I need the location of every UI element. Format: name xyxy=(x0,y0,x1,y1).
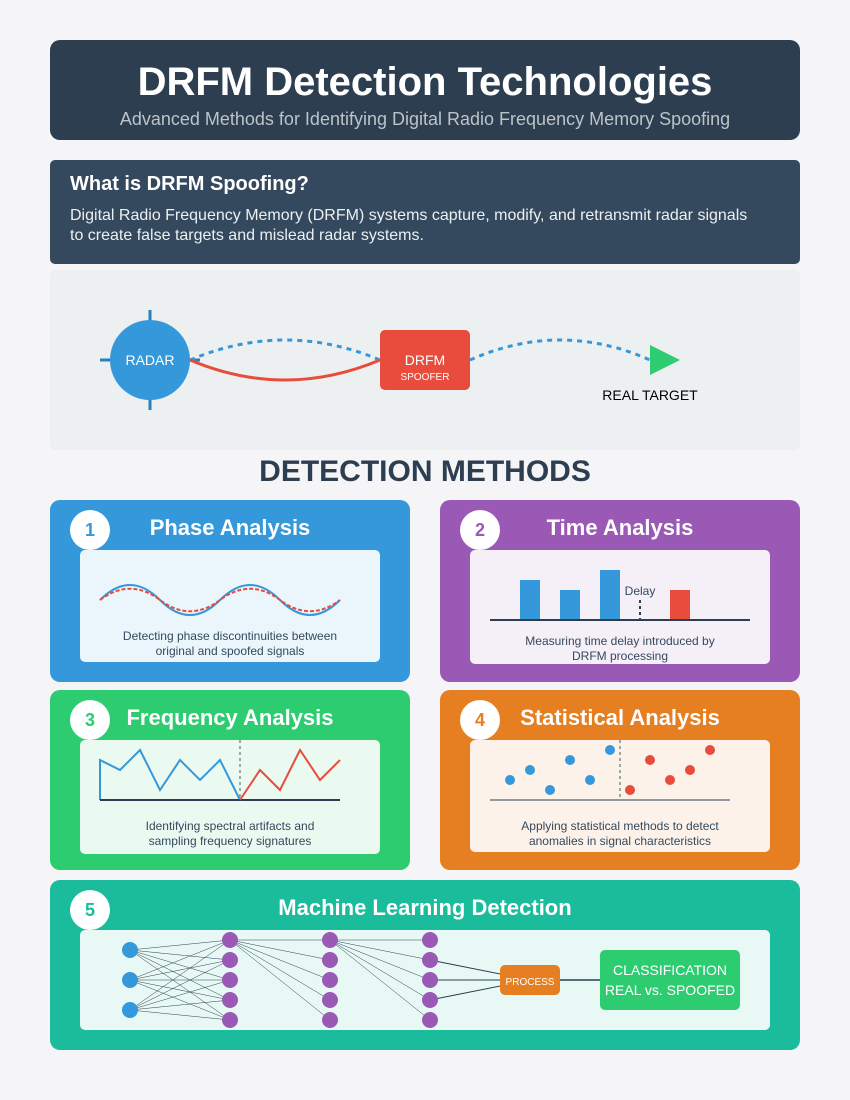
hidden layer nodes xyxy=(222,932,438,1028)
badge 1: 1 xyxy=(85,520,95,540)
delay marker xyxy=(625,584,655,620)
panel: phase analysis xyxy=(50,500,410,682)
badge 3 xyxy=(70,700,110,740)
inner panel: frequency chart xyxy=(80,740,380,854)
badge 5: 5 xyxy=(85,900,95,920)
chart: spoofed signal wave xyxy=(100,589,340,611)
caption: time analysis: Measuring time delay introduced by xyxy=(525,634,715,648)
title: DRFM Detection Technologies xyxy=(138,60,712,104)
inner panel: phase chart xyxy=(80,550,380,662)
heading: detection methods: DETECTION METHODS xyxy=(259,455,591,488)
badge 4 xyxy=(460,700,500,740)
delay marker: Delay xyxy=(625,584,655,598)
heading: machine learning detection: Machine Learning Detection xyxy=(278,895,572,920)
heading: frequency analysis: Frequency Analysis xyxy=(126,705,334,730)
chart: spectrum lines xyxy=(100,740,340,800)
badge 3: 3 xyxy=(85,710,95,730)
title banner xyxy=(50,40,800,140)
panel: spoofing diagram xyxy=(50,270,800,450)
subtitle: Advanced Methods for Identifying Digital Radio Frequency Memory Spoofing xyxy=(120,109,730,129)
network connections xyxy=(130,940,600,1020)
text block: definition: to create false targets and mislead radar systems. xyxy=(70,227,424,244)
DRFM spoofer box xyxy=(380,330,470,390)
inner panel: time chart xyxy=(470,550,770,664)
DRFM spoofer box: DRFM xyxy=(405,352,445,368)
caption: frequency analysis: sampling frequency signatures xyxy=(149,834,311,848)
chart: pulse bars xyxy=(490,570,750,620)
text block: definition: Digital Radio Frequency Memory (DRFM) systems capture, modify, and retransmit radar signals xyxy=(70,207,747,224)
chart: scatter plot xyxy=(490,740,730,800)
caption: phase analysis: original and spoofed signals xyxy=(156,644,304,658)
heading: what is DRFM spoofing: What is DRFM Spoofing? xyxy=(70,173,309,195)
classification box xyxy=(600,950,740,1010)
badge 2 xyxy=(460,510,500,550)
heading: time analysis: Time Analysis xyxy=(547,515,693,540)
badge 4: 4 xyxy=(475,710,485,730)
badge 5 xyxy=(70,890,110,930)
panel: statistical analysis xyxy=(440,690,800,870)
icon: real target xyxy=(650,345,680,375)
label: real target: REAL TARGET xyxy=(602,387,698,403)
caption: statistical analysis: Applying statistical methods to detect xyxy=(521,819,719,833)
badge 1 xyxy=(70,510,110,550)
icon: radar xyxy=(100,310,200,410)
classification box: REAL vs. SPOOFED xyxy=(605,982,735,998)
inner panel: scatter chart xyxy=(470,740,770,852)
caption: frequency analysis: Identifying spectral artifacts and xyxy=(146,819,314,833)
inner panel: neural network xyxy=(80,930,770,1030)
DRFM spoofer box: SPOOFER xyxy=(401,372,449,383)
caption: time analysis: DRFM processing xyxy=(572,649,668,663)
arrow: spoofed return to radar xyxy=(190,360,380,380)
chart: original signal wave xyxy=(100,585,340,615)
badge 2: 2 xyxy=(475,520,485,540)
panel: machine learning detection xyxy=(50,880,800,1050)
arrow: radar signal to DRFM xyxy=(190,340,380,360)
panel: what is DRFM spoofing xyxy=(50,160,800,264)
classification box: CLASSIFICATION xyxy=(613,962,727,978)
panel: time analysis xyxy=(440,500,800,682)
heading: phase analysis: Phase Analysis xyxy=(150,515,310,540)
input nodes xyxy=(122,942,138,1018)
arrow: DRFM to target xyxy=(470,340,650,360)
caption: statistical analysis: anomalies in signal characteristics xyxy=(529,834,711,848)
caption: phase analysis: Detecting phase discontinuities between xyxy=(123,629,337,643)
panel: frequency analysis xyxy=(50,690,410,870)
process box: PROCESS xyxy=(506,977,555,988)
heading: statistical analysis: Statistical Analysis xyxy=(520,705,720,730)
process box xyxy=(500,965,560,995)
icon: radar: RADAR xyxy=(125,352,175,368)
